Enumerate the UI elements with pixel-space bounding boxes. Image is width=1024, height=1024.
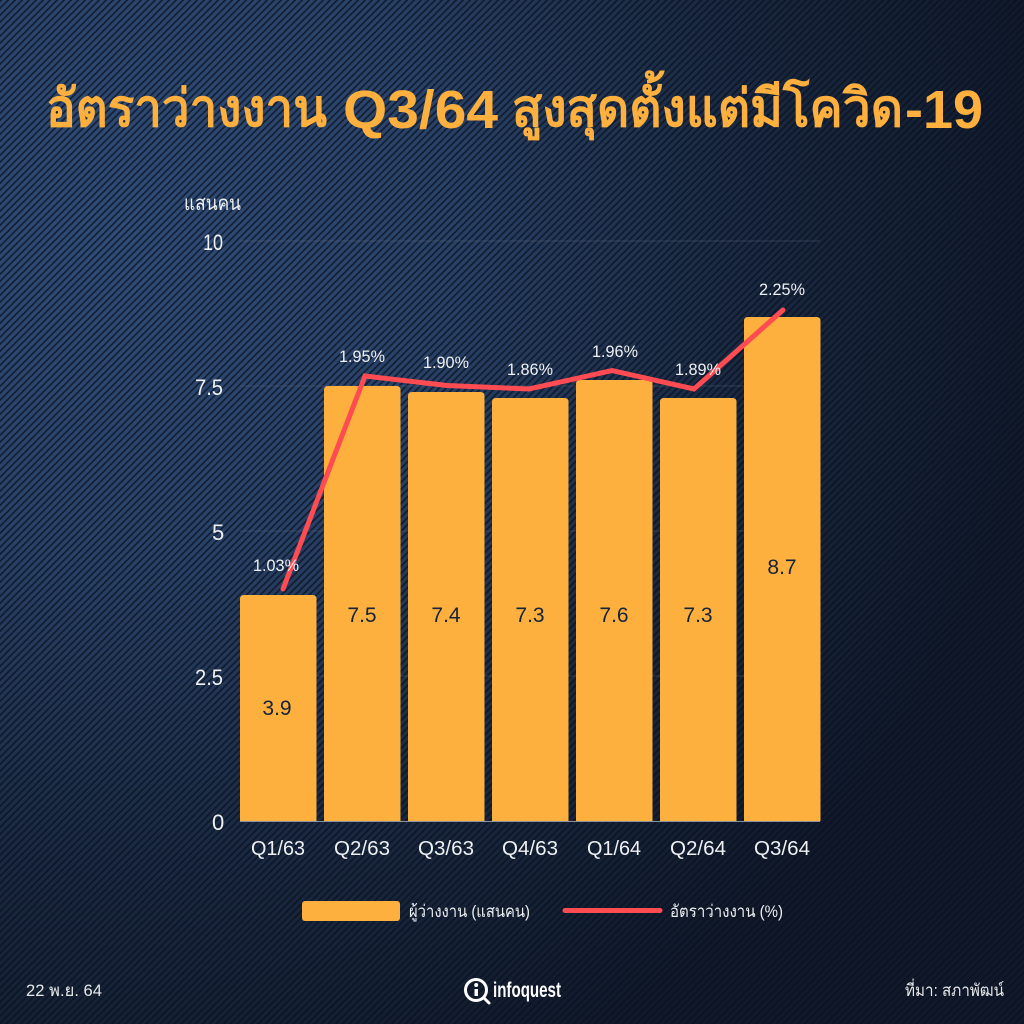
bar value labels	[262, 556, 797, 720]
rate labels: 1.96%	[592, 342, 638, 361]
bar value labels: 7.5	[347, 604, 377, 627]
rate labels: 1.89%	[675, 360, 721, 379]
bars	[240, 317, 820, 821]
date: 22 พ.ย. 64	[26, 981, 102, 1000]
x axis labels	[251, 838, 810, 860]
bar value labels: 7.4	[431, 604, 461, 627]
rate labels: 1.90%	[423, 353, 469, 372]
x axis labels: Q1/64	[587, 838, 641, 860]
y axis labels and gridlines: 2.5	[195, 665, 223, 690]
title: อัตราว่างงาน	[46, 80, 327, 138]
bar value labels: 8.7	[767, 556, 797, 579]
y axis unit label: แสนคน	[184, 193, 241, 215]
rate labels: 1.86%	[507, 360, 553, 379]
bar value labels: 7.6	[599, 604, 629, 627]
y axis labels and gridlines: 7.5	[195, 375, 223, 400]
source: ที่มา: สภาพัฒน์	[905, 978, 1004, 1000]
x axis labels: Q1/63	[251, 838, 305, 860]
y axis labels and gridlines: 0	[212, 810, 224, 835]
legend label: line: อัตราว่างงาน (%)	[670, 902, 783, 921]
x axis labels: Q3/64	[754, 838, 810, 860]
title	[46, 70, 983, 141]
rate labels: 2.25%	[759, 280, 805, 299]
legend swatch: line	[565, 908, 660, 913]
title: -19	[905, 80, 983, 140]
y axis labels and gridlines	[195, 230, 820, 835]
bar value labels: 7.3	[515, 604, 545, 627]
icon: magnifier i	[466, 980, 489, 1003]
x axis labels: Q2/64	[670, 838, 726, 860]
legend swatch: bars	[302, 901, 400, 921]
bar value labels: 3.9	[262, 697, 292, 720]
rate labels	[253, 280, 805, 575]
legend	[302, 901, 783, 922]
bar value labels: 7.3	[683, 604, 713, 627]
y axis labels and gridlines: 10	[203, 230, 223, 255]
x axis labels: Q3/63	[418, 838, 474, 860]
x axis labels: Q2/63	[334, 838, 390, 860]
rate labels: 1.03%	[253, 556, 299, 575]
logo wordmark: infoquest	[493, 979, 561, 1002]
rate labels: 1.95%	[339, 347, 385, 366]
title: Q3/64	[343, 80, 498, 140]
unemployment rate line	[283, 310, 783, 589]
title: สูงสุดตั้งแต่มีโควิด	[512, 70, 903, 141]
y axis labels and gridlines: 5	[212, 520, 224, 545]
chart	[184, 193, 820, 860]
x axis labels: Q4/63	[502, 838, 558, 860]
legend label: bars: ผู้ว่างงาน (แสนคน)	[409, 902, 530, 922]
axis baseline	[240, 820, 820, 822]
logo: infoquest	[466, 979, 561, 1003]
